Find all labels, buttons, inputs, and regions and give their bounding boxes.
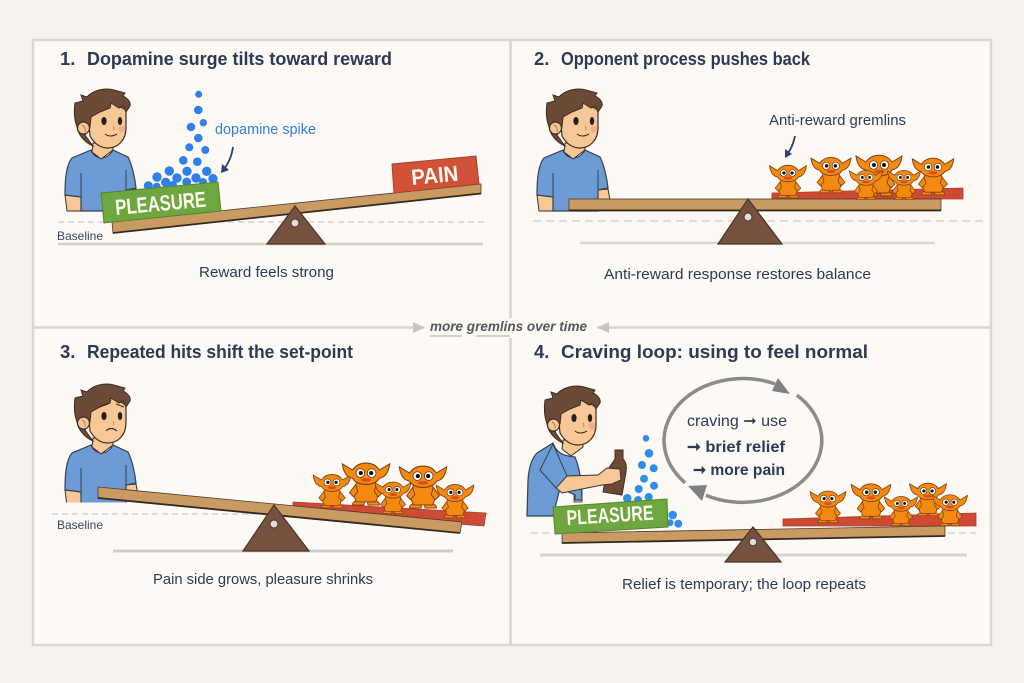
arrow: to gremlins <box>785 136 795 158</box>
seesaw <box>98 487 486 551</box>
heading: 1. <box>60 48 75 69</box>
loop text: ➞ brief relief <box>687 439 786 456</box>
gremlins <box>313 463 474 518</box>
baseline: Baseline <box>57 229 103 243</box>
gremlins <box>770 155 954 200</box>
icon: person <box>65 89 138 211</box>
arm and hand <box>555 468 621 493</box>
icon: bottle <box>603 450 626 495</box>
pain block: PAIN <box>410 161 459 190</box>
pleasure block: PLEASURE <box>114 187 207 220</box>
heading: Craving loop: using to feel normal <box>561 341 868 362</box>
icon: sad person <box>60 384 140 510</box>
caption: Reward feels strong <box>199 264 334 281</box>
caption: Pain side grows, pleasure shrinks <box>153 571 373 588</box>
gremlins <box>810 483 967 526</box>
gremlins label: Anti-reward gremlins <box>769 113 906 129</box>
loop arrows <box>664 378 822 502</box>
panel: 2 opponent process <box>533 48 985 283</box>
center label: more gremlins over time: more gremlins over time <box>430 319 587 334</box>
seesaw <box>533 188 985 244</box>
panel: 3 set-point shift <box>52 341 490 588</box>
heading: Repeated hits shift the set-point <box>87 341 353 362</box>
loop text: ➞ more pain <box>693 462 785 479</box>
caption: Relief is temporary; the loop repeats <box>622 576 866 593</box>
caption: Anti-reward response restores balance <box>604 266 871 283</box>
heading: 3. <box>60 341 75 362</box>
sleeve <box>540 444 567 488</box>
seesaw <box>58 184 483 244</box>
icon: person with bottle <box>527 386 626 516</box>
panel: 1 dopamine surge <box>57 48 487 281</box>
pleasure block: PLEASURE <box>566 502 654 530</box>
pain block <box>392 156 479 193</box>
heading: 4. <box>534 341 549 362</box>
dopamine spike label: dopamine spike <box>215 122 316 138</box>
center label: more gremlins over time <box>413 318 609 338</box>
heading: 2. <box>534 48 549 69</box>
dopamine dots <box>144 91 218 191</box>
icon: person <box>537 89 610 211</box>
loop text <box>687 413 787 479</box>
heading: Dopamine surge tilts toward reward <box>87 48 392 69</box>
heading: Opponent process pushes back <box>561 48 811 69</box>
arrow: to dots <box>221 147 233 173</box>
dopamine dots <box>623 435 682 528</box>
loop text: craving ➞ use <box>687 413 787 430</box>
pleasure block <box>553 499 668 534</box>
baseline: Baseline <box>57 518 103 532</box>
panel: 4 craving loop <box>527 341 976 593</box>
seesaw <box>531 513 976 562</box>
